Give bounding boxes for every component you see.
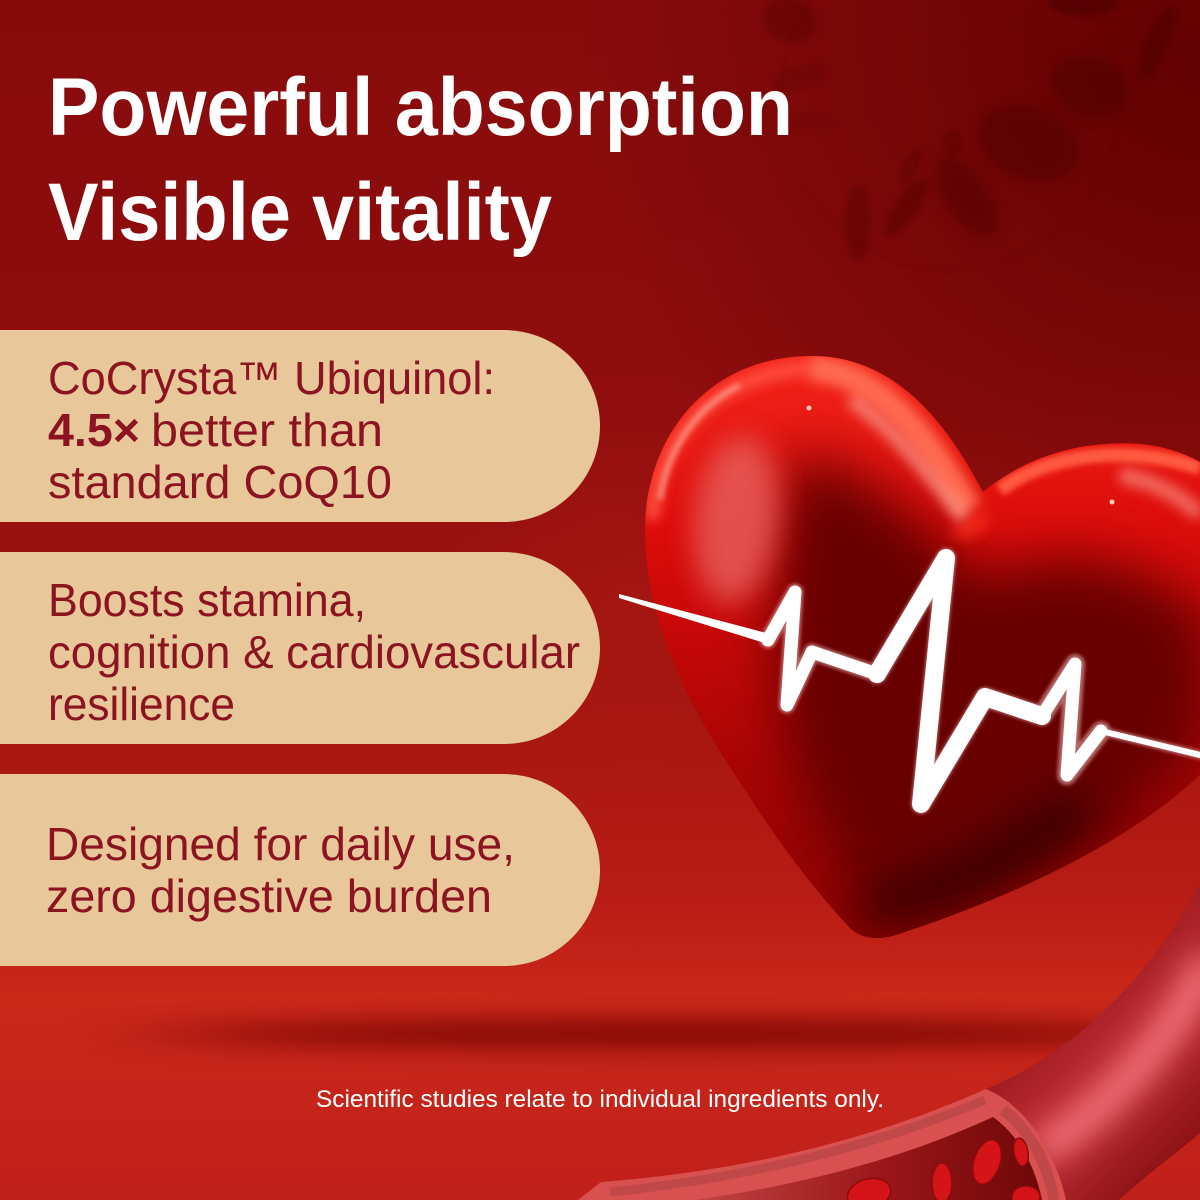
- panel: daily use: Designed for daily use,: [46, 818, 515, 870]
- title: Visible vitality: [48, 167, 552, 258]
- line core: [619, 558, 1200, 804]
- panel: daily use: [0, 774, 600, 966]
- panel: stamina and resilience: [0, 552, 600, 744]
- heartbeat line: [619, 558, 1200, 804]
- footnote: Scientific studies relate to individual ingredients only.: [316, 1086, 884, 1113]
- vessel tube: [980, 880, 1200, 1200]
- floor shadow band: [160, 1020, 1200, 1048]
- wall texture: [610, 1100, 985, 1192]
- panel: stamina and resilience: cognition & cardiovascular: [48, 626, 580, 678]
- panel: CoCrysta Ubiquinol: CoCrysta™ Ubiquinol:: [48, 352, 495, 404]
- heart illustration: [640, 350, 1200, 950]
- panel: CoCrysta Ubiquinol: [0, 330, 600, 522]
- panel: stamina and resilience: Boosts stamina,: [48, 574, 366, 626]
- faint red blood cells top right: [758, 0, 1183, 270]
- panel: daily use: zero digestive burden: [46, 870, 492, 922]
- panel: stamina and resilience: resilience: [48, 678, 235, 730]
- vessel cut wall: [578, 1089, 1066, 1200]
- red blood cells: [844, 1136, 1040, 1200]
- panel: CoCrysta Ubiquinol: standard CoQ10: [48, 456, 392, 508]
- blood vessel illustration: [578, 880, 1200, 1200]
- vessel lumen: [695, 1117, 1042, 1200]
- title: [48, 62, 793, 258]
- line glow: [768, 558, 1200, 804]
- panel: CoCrysta Ubiquinol: 4.5×: [48, 404, 140, 456]
- panel: CoCrysta Ubiquinol: better than: [151, 404, 383, 456]
- title: Powerful absorption: [48, 62, 793, 153]
